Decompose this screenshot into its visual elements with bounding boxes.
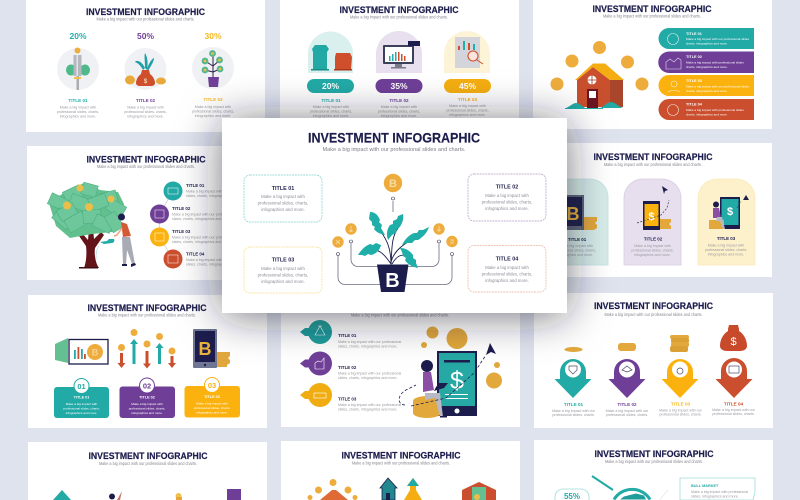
text blocks: TITLE 01 [564, 402, 584, 407]
callout: bull market: BULL MARKET [691, 484, 719, 488]
pills: 20% [322, 81, 339, 91]
pills [307, 79, 491, 93]
card: title 03 [244, 247, 322, 293]
card: title 01: professional slides, charts, [258, 200, 308, 206]
card: title 02: professional slides, charts, [482, 200, 532, 204]
card: yellow arch: infographics and more. [708, 252, 744, 256]
numbered boxes: infographics and more. [131, 411, 163, 415]
partial icons [53, 489, 241, 500]
icon: money bag [125, 53, 166, 86]
text blocks: Make a big impact with [60, 106, 96, 110]
icon: coin stacks and bag [564, 325, 747, 352]
icon: person on coins [399, 343, 496, 418]
panel: bottom centre slide [281, 441, 520, 500]
connector lines [336, 197, 454, 284]
card: title 03: infographics and more. [261, 279, 305, 284]
card: title 02: TITLE 02 [496, 184, 518, 190]
step labels: slides, charts, infographics [186, 194, 229, 198]
icon: phone with dollar: $ [450, 367, 464, 395]
text blocks: TITLE 01 [321, 98, 341, 103]
card: title 01 [244, 175, 322, 222]
text blocks: Make a big impact with our [552, 409, 596, 413]
info bars: TITLE 01 [686, 32, 702, 36]
icon circles [57, 47, 234, 90]
step labels: TITLE 03 [172, 229, 191, 234]
heading: INVESTMENT INFOGRAPHIC [342, 450, 461, 460]
card: title 01: Make a big impact with [261, 194, 305, 199]
text blocks: infographics and more. [60, 114, 96, 118]
callout: bull market: Make a big impact with professional [691, 490, 748, 494]
icon: report with magnifier [455, 37, 483, 68]
subheading: Make a big impact with our professional slides and charts. [352, 460, 450, 466]
text blocks: TITLE 04 [724, 402, 744, 406]
numbered boxes: 03 [208, 381, 216, 390]
info bars: Make a big impact with our professional slides [686, 37, 750, 41]
icon: magnifier with bull [592, 476, 650, 500]
numbered boxes: professional slides, charts, [63, 406, 100, 410]
numbered boxes: infographics and more. [66, 411, 97, 415]
list text: slides, charts, infographics and more. [338, 408, 398, 412]
numbered boxes: professional slides, charts, [129, 406, 165, 410]
card: purple arch: Make a big impact with [634, 244, 671, 248]
icon: bitcoin pot [377, 264, 408, 292]
numbered boxes: Make a big impact with [196, 402, 228, 406]
icon: money tree [47, 182, 127, 268]
panel: down arrows slide [534, 293, 773, 428]
step labels: TITLE 04 [186, 252, 205, 256]
pills: 45% [459, 81, 476, 91]
text blocks: TITLE 02 [617, 402, 637, 407]
card: teal arch [550, 179, 608, 265]
card: title 03: professional slides, charts, [258, 272, 308, 278]
card: purple arch: TITLE 02 [644, 236, 663, 242]
text blocks [310, 97, 489, 118]
text blocks: infographics and more. [127, 114, 164, 118]
card: title 02: Make a big impact with [485, 193, 529, 198]
card: title 01: TITLE 01 [272, 186, 294, 192]
card: title 04: TITLE 04 [496, 256, 518, 262]
step labels: slides, charts, infographics and [172, 240, 221, 244]
text blocks: professional slides, charts. [659, 412, 702, 416]
pills: 35% [390, 81, 408, 91]
info bars: TITLE 03 [686, 79, 702, 83]
info bars: TITLE 02 [686, 55, 702, 59]
heading: INVESTMENT INFOGRAPHIC [88, 450, 208, 461]
icon: plant [358, 212, 429, 268]
icon: teal bull and red bear [311, 45, 352, 70]
text blocks: professional slides, charts, [192, 110, 234, 114]
card: teal arch: B [566, 204, 580, 224]
card: title 03: Make a big impact with [261, 266, 305, 271]
list text: slides, charts, infographics and more. [338, 344, 398, 348]
icon: bitcoin pot: B [385, 270, 400, 292]
step labels: TITLE 02 [172, 206, 191, 211]
percentages: 30% [204, 31, 222, 41]
main panel: plant infographic [222, 118, 567, 313]
heading: INVESTMENT INFOGRAPHIC [594, 448, 714, 459]
list icons [300, 320, 332, 407]
icon: phone with bitcoin: B [198, 339, 212, 359]
text blocks: TITLE 02 [389, 98, 409, 103]
card: title 04: professional slides, charts, [482, 272, 532, 276]
numbered boxes: TITLE 01 [74, 396, 89, 400]
text blocks: professional slides, charts, [310, 110, 352, 114]
card: yellow arch: professional slides, charts, [705, 248, 747, 252]
info bars: Make a big impact with professional slides [686, 60, 744, 64]
icon: coins [550, 41, 648, 90]
text blocks [552, 402, 756, 417]
card: purple arch: $ [648, 211, 655, 223]
icon: house [565, 64, 624, 109]
subheading: Make a big impact with our professional slides and charts. [350, 14, 448, 20]
card: yellow arch: Make a big impact with [708, 244, 744, 248]
text blocks: TITLE 03 [203, 97, 223, 102]
icon: coins in the air [421, 326, 502, 388]
text blocks: infographics and more. [449, 113, 486, 117]
panel: bottom left slide [28, 442, 267, 500]
icon: gardener [96, 214, 136, 267]
info bars [658, 28, 754, 120]
card: purple arch [624, 179, 681, 265]
icon: bitcoin coins [332, 174, 458, 248]
callout: bull market: slides, infographics and more. [691, 494, 739, 498]
step labels: Make a big impact with our profess [172, 212, 228, 216]
subheading: Make a big impact with our professional slides and charts. [605, 459, 703, 464]
panel: person on coins slide [281, 300, 520, 427]
step labels [172, 183, 230, 266]
numbered boxes: professional slides, charts, [194, 406, 230, 410]
percentages [69, 31, 222, 41]
info bars: charts, infographics and more. [686, 89, 728, 93]
card: teal arch: Make a big impact with [557, 244, 593, 248]
main heading: INVESTMENT INFOGRAPHIC [308, 130, 480, 146]
card: teal arch: TITLE 01 [568, 237, 587, 242]
numbered boxes [54, 378, 240, 418]
subheading: Make a big impact with our professional slides and charts. [351, 312, 449, 318]
card: yellow arch: $ [727, 206, 733, 218]
percentages: 20% [69, 31, 87, 41]
subheading: Make a big impact with our professional slides and charts. [603, 14, 701, 18]
card: title 04: infographics and more. [485, 278, 529, 283]
heading: INVESTMENT INFOGRAPHIC [86, 154, 206, 164]
text blocks: professional slides, charts, [124, 110, 167, 114]
text blocks: Make a big impact with our [659, 408, 703, 412]
panel: percent pills slide [280, 0, 519, 120]
numbered boxes: Make a big impact with [131, 402, 163, 406]
text blocks: TITLE 01 [68, 98, 88, 103]
text blocks: TITLE 02 [136, 98, 156, 103]
icon: bitcoin coins: B [389, 178, 397, 190]
subheading: Make a big impact with our professional slides and charts. [604, 162, 702, 167]
card: purple arch: infographics and more. [634, 253, 671, 257]
heading: INVESTMENT INFOGRAPHIC [86, 6, 205, 17]
step labels: Make a big impact with our profess [172, 236, 228, 240]
text blocks: Make a big impact with our [712, 408, 756, 412]
text blocks: infographics and more. [381, 114, 417, 118]
card: purple arch: professional slides, charts, [631, 248, 674, 252]
list text: Make a big impact with our professional [338, 372, 401, 376]
text blocks: infographics and more. [195, 114, 231, 118]
heading: INVESTMENT INFOGRAPHIC [594, 300, 713, 311]
text blocks: TITLE 03 [671, 402, 691, 406]
text blocks: professional slides, charts, [446, 108, 489, 112]
text blocks: Make a big impact with [381, 105, 417, 109]
percentages: 50% [137, 31, 154, 41]
info bars: Make a big impact with professional slides [686, 108, 744, 112]
card: teal arch: infographics and more. [557, 253, 593, 257]
card: teal arch: professional slides, charts, [554, 248, 596, 252]
text blocks: TITLE 03 [458, 97, 478, 102]
callout: bull market [660, 478, 755, 500]
text blocks: professional slides, charts. [552, 413, 595, 417]
heading: INVESTMENT INFOGRAPHIC [88, 302, 207, 313]
card: title 04: Make a big impact with [485, 265, 529, 270]
numbered boxes: 01 [77, 382, 86, 391]
text blocks: infographics and more. [313, 114, 349, 118]
panel: bottom right slide [534, 440, 773, 500]
info bars: Make a big impact with our professional slides [686, 84, 750, 88]
card: title 02: infographics and more. [485, 206, 529, 211]
stat pill [555, 489, 589, 500]
panel: house slide [533, 0, 772, 129]
step labels: Make a big impact with our [186, 258, 230, 262]
text blocks: professional slides, charts. [606, 413, 648, 417]
icon: plant [202, 50, 223, 87]
numbered boxes: Make a big impact with [66, 402, 98, 406]
subheading: Make a big impact with our professional slides and charts. [96, 16, 194, 22]
step labels: TITLE 01 [186, 183, 205, 188]
card: title 03: TITLE 03 [272, 258, 294, 264]
heading: INVESTMENT INFOGRAPHIC [592, 3, 712, 14]
icon: money bag: $ [144, 79, 148, 85]
subheading: Make a big impact with our professional slides and charts. [604, 312, 702, 317]
list text: TITLE 03 [338, 396, 357, 402]
icon: monitor [383, 41, 420, 68]
panel: arch phones slide [533, 143, 772, 277]
icon: monitor with bitcoin coin: B [92, 348, 99, 358]
numbered boxes: 02 [143, 382, 151, 390]
subheading: Make a big impact with our professional slides and charts. [99, 461, 197, 466]
numbered boxes: TITLE 02 [139, 396, 155, 400]
panel: percent circles slide [26, 0, 265, 132]
numbered boxes: infographics and more. [196, 410, 228, 414]
subheading: Make a big impact with our professional slides and charts. [98, 312, 196, 318]
main subheading: Make a big impact with our professional slides and charts. [322, 147, 466, 153]
card: title 02 [468, 174, 546, 221]
list text [338, 333, 401, 412]
step labels: slides, charts, infographics [186, 262, 229, 266]
panel: money tree slide [27, 146, 247, 280]
text blocks [57, 97, 234, 118]
list text: slides, charts, infographics and more. [338, 376, 398, 380]
card: yellow arch [698, 179, 755, 265]
info bars: charts, infographics and more. [686, 42, 728, 46]
text blocks: Make a big impact with [127, 106, 164, 110]
card: yellow arch: TITLE 03 [717, 236, 736, 241]
step circles [150, 182, 182, 268]
icon: phone with dollar [437, 351, 477, 416]
subheading: Make a big impact with our professional slides and charts. [97, 164, 195, 169]
text blocks: Make a big impact with [449, 104, 486, 108]
card: title 01: infographics and more. [261, 207, 305, 212]
text blocks: Make a big impact with [195, 105, 231, 109]
info bars: charts, infographics and more. [686, 65, 728, 69]
step labels: slides, charts, infographics and [172, 217, 221, 221]
text blocks: professional slides, charts, [57, 110, 99, 114]
icon: dart [66, 48, 90, 90]
text blocks: professional slides, charts. [712, 412, 755, 416]
arrows [554, 358, 752, 398]
list text: TITLE 01 [338, 333, 357, 338]
list text: Make a big impact with our professional [338, 403, 401, 407]
card: title 04 [468, 246, 546, 292]
icon: phone with bitcoin [193, 329, 230, 368]
heading: INVESTMENT INFOGRAPHIC [594, 151, 713, 162]
icon: up and down arrows with coins [118, 329, 176, 368]
panel: numbered boxes slide [28, 295, 267, 428]
step labels: Make a big impact with our [186, 190, 230, 194]
list text: Make a big impact with our professional [338, 340, 401, 344]
list text: TITLE 02 [338, 365, 357, 370]
info bars: TITLE 04 [686, 102, 703, 106]
arches [308, 31, 490, 73]
text blocks: professional slides, charts, [378, 110, 420, 114]
text blocks: Make a big impact with [313, 105, 349, 109]
icon: coin stacks and bag: $ [730, 336, 737, 348]
text blocks: Make a big impact with our [606, 409, 649, 413]
numbered boxes: TITLE 03 [204, 395, 220, 399]
heading: INVESTMENT INFOGRAPHIC [340, 4, 459, 15]
info bars: charts, infographics and more. [686, 112, 728, 116]
partial icons [308, 478, 496, 500]
icon: monitor with bitcoin coin [55, 338, 108, 364]
